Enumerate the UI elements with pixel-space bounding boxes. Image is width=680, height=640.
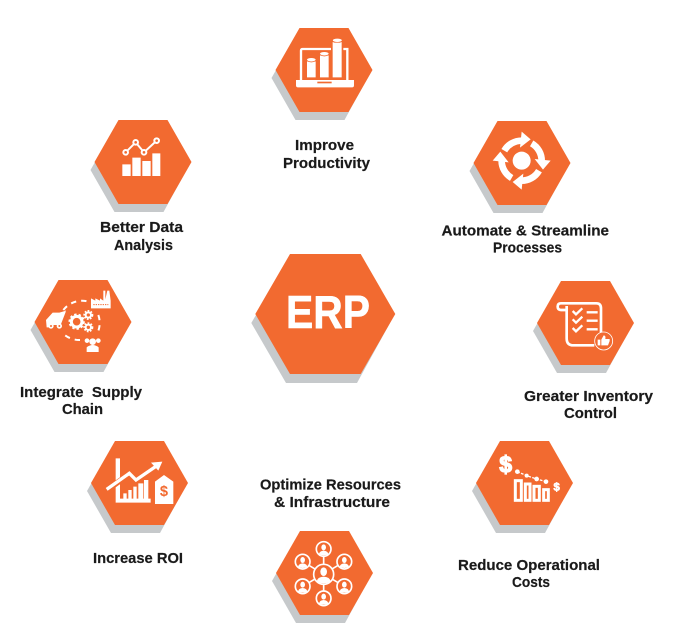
label [100,220,184,254]
hexagon badge [272,531,373,623]
title: ERP: ERP [286,286,370,338]
panel: Reduce Operational Costs [458,441,600,591]
hexagon badge [90,120,192,212]
panel: Integrate Supply Chain [20,280,143,418]
label: Greater Inventory [524,389,654,405]
label [283,138,371,172]
icon: falling cost chart: $ [499,451,512,477]
hexagon badge [533,281,634,373]
panel: Better Data Analysis [90,120,192,254]
label [442,224,609,256]
icon: checklist scroll with thumbs up [558,303,613,350]
label: Costs [512,575,550,591]
icon: connected people network [295,542,352,606]
label: Control [564,406,617,422]
label [20,385,143,418]
central ERP hexagon [251,254,395,383]
hexagon badge [472,441,573,533]
hexagon badge [30,280,132,372]
icon: falling cost chart: $ [554,481,561,493]
label: Optimize Resources [260,478,401,494]
icon: circular arrows [493,132,551,190]
label [458,558,600,591]
label: & Infrastructure [274,495,390,511]
hexagon badge [470,121,570,213]
panel: Optimize Resources & Infrastructure [260,478,401,623]
label: Analysis [114,238,173,254]
icon: falling cost chart [499,451,561,500]
label: Integrate Supply [20,385,143,401]
icon: rising chart with price tag: $ [160,484,168,500]
label: Reduce Operational [458,558,600,574]
label [524,389,654,422]
label: Improve [295,138,354,154]
label [260,478,401,511]
panel: Improve Productivity [272,28,372,172]
panel: Greater Inventory Control [524,281,654,422]
label: Chain [62,402,103,418]
label: Better Data [100,220,184,236]
label: Processes [493,240,562,256]
icon: bar chart with trend line [122,138,160,176]
panel: Automate & Streamline Processes [442,121,609,256]
label: Automate & Streamline [442,224,609,240]
label: Increase ROI [93,551,183,567]
hexagon badge [272,28,372,120]
panel: Increase ROI [87,441,188,567]
icon: laptop with cylinder bars [296,37,354,87]
hexagon badge [87,441,188,533]
icon: supply chain with truck, gears, factory and people [46,291,111,352]
label: Productivity [283,156,371,172]
